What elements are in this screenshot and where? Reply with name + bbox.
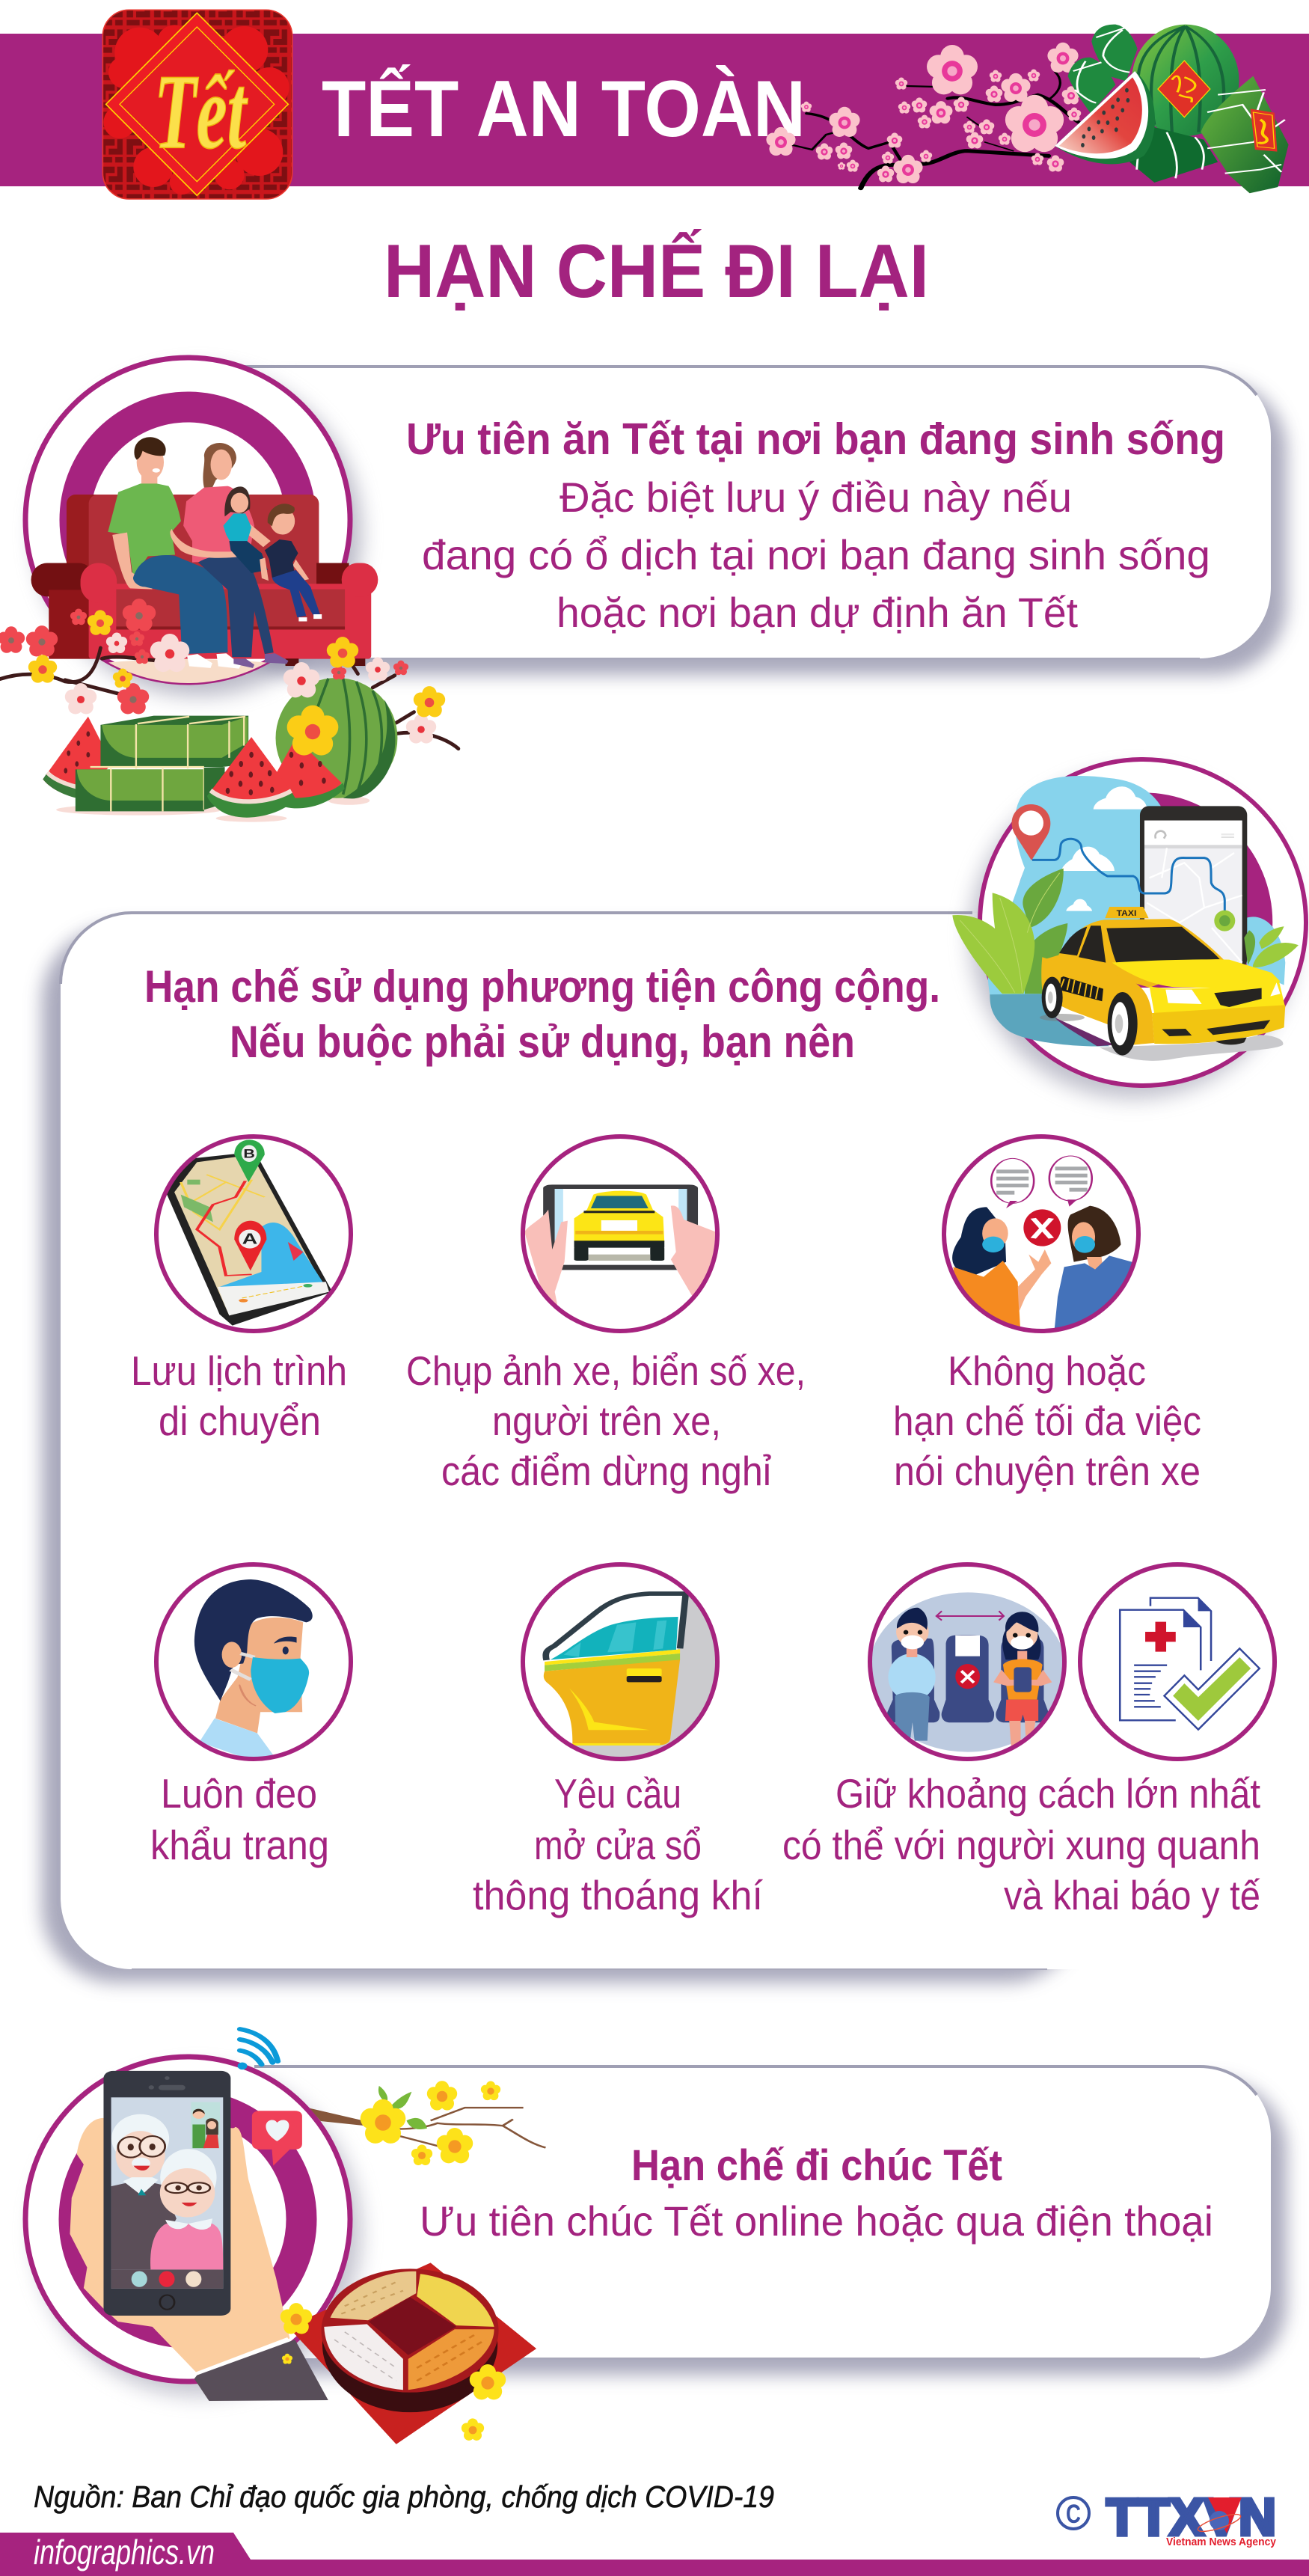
label: Yêu cầu: [554, 1770, 681, 1817]
man: [108, 437, 241, 669]
panel shadow: [42, 926, 1082, 1983]
label: Chụp ảnh xe, biển số xe,: [406, 1347, 806, 1394]
watermelon slices front: [266, 738, 342, 801]
hand: [70, 2118, 289, 2373]
icon: map on phone: [156, 1136, 351, 1331]
label: thông thoáng khí: [473, 1872, 764, 1918]
label: có thể với người xung quanh: [782, 1822, 1260, 1868]
panel text: Đặc biệt lưu ý điều này nếu: [560, 474, 1072, 521]
label: di chuyển: [159, 1398, 321, 1444]
icon: taxi and route in circle: TAXI: [1117, 909, 1136, 918]
icon: video call on phone in circle: [25, 2029, 361, 2401]
thumb overlap: [231, 2128, 245, 2185]
grandmother: [160, 2149, 217, 2206]
label: Không hoặc: [948, 1347, 1146, 1394]
label: nói chuyện trên xe: [894, 1448, 1201, 1494]
item: avoid talking: [893, 1136, 1201, 1494]
label: khẩu trang: [150, 1822, 329, 1868]
watermelon slice back: [43, 717, 112, 798]
item: open the window: [473, 1564, 764, 1918]
panel shadow: [224, 2080, 1287, 2375]
label: các điểm dừng nghỉ: [441, 1448, 771, 1494]
label: Luôn đeo: [161, 1770, 317, 1817]
label: hạn chế tối đa việc: [893, 1398, 1201, 1444]
panel heading: Hạn chế sử dụng phương tiện công cộng.: [144, 961, 940, 1012]
icon: taxi and route in circle: [952, 759, 1306, 1098]
decoration: apricot branch: [310, 2081, 545, 2165]
panel: limit Tet visits: [150, 2066, 1287, 2375]
icon: family on sofa in circle: [25, 358, 378, 696]
copyright mark: C: [1066, 2500, 1081, 2529]
panel text: Hạn chế đi chúc Tết: [631, 2141, 1002, 2190]
branch of pink blossoms in header: [766, 43, 1081, 189]
icon: man in mask: [156, 1564, 351, 1760]
icon: map on phone: A: [242, 1231, 257, 1247]
label: [893, 1347, 1201, 1494]
copyright mark: [1058, 2497, 1089, 2529]
label: [150, 1770, 329, 1868]
icon: passengers with empty seat between: [868, 1564, 1067, 1759]
logo: TTXVN: Vietnam News Agency: [1166, 2536, 1277, 2548]
panel heading: Nếu buộc phải sử dụng, bạn nên: [230, 1017, 855, 1067]
icon: Tet badge: Tết: [154, 52, 248, 171]
panel text: [420, 2141, 1213, 2245]
icon: car door with open window: [523, 1564, 722, 1764]
label: [131, 1347, 347, 1444]
header band: [0, 34, 1309, 186]
icon: tablet photographing taxi: [523, 1136, 717, 1331]
banh chung: [100, 716, 248, 767]
panel heading: [144, 961, 940, 1067]
illustration: watermelon and banh chung in header: [1055, 25, 1289, 193]
icon: map on phone: B: [243, 1146, 255, 1160]
item: save travel route: [131, 1136, 351, 1444]
panel: public transport: [42, 913, 1275, 1983]
panel: stay where you live: [150, 366, 1287, 675]
icon: two masked women talking: [944, 1136, 1138, 1331]
label: Giữ khoảng cách lớn nhất: [836, 1770, 1260, 1817]
panel text: [406, 414, 1225, 636]
woman: [183, 443, 289, 668]
label: Lưu lịch trình: [131, 1347, 347, 1394]
main title: HẠN CHẾ ĐI LẠI: [384, 230, 929, 313]
label: [406, 1347, 806, 1494]
icon: medical documents with check: [1080, 1564, 1275, 1759]
phone: [103, 2071, 230, 2316]
header title: TẾT AN TOÀN: [322, 64, 806, 153]
inset: [191, 2102, 220, 2149]
boy: [260, 504, 322, 621]
item: photograph the car: [406, 1136, 806, 1494]
panel text: hoặc nơi bạn dự định ăn Tết: [557, 589, 1078, 636]
whole watermelon: [276, 678, 397, 798]
footer band with site name: [0, 2533, 1309, 2576]
source line: Nguồn: Ban Chỉ đạo quốc gia phòng, chống dịch COVID-19: [34, 2479, 774, 2514]
site name: infographics.vn: [34, 2533, 215, 2572]
panel text: Ưu tiên ăn Tết tại nơi bạn đang sinh sống: [406, 414, 1225, 464]
grandfather: [111, 2180, 177, 2269]
label: [473, 1770, 764, 1918]
label: và khai báo y tế: [1004, 1872, 1260, 1918]
illustration: Tet food tray: [280, 2263, 536, 2444]
decoration: flowers, banh chung and watermelon: [0, 599, 459, 822]
girl: [224, 486, 268, 573]
label: mở cửa sổ: [534, 1822, 702, 1868]
panel text: Ưu tiên chúc Tết online hoặc qua điện thoại: [420, 2197, 1213, 2245]
label: [782, 1770, 1260, 1918]
icon: Tet badge: [102, 10, 292, 199]
label: người trên xe,: [492, 1398, 721, 1444]
panel text: đang có ổ dịch tại nơi bạn đang sinh sống: [422, 531, 1210, 578]
panel shadow: [224, 380, 1287, 675]
item: keep distance and medical declaration: [782, 1564, 1275, 1918]
logo: TTXVN: TTXVN: [1106, 2488, 1276, 2546]
wifi signal: [240, 2029, 278, 2064]
like bubble: [252, 2111, 302, 2166]
item: wear a mask: [150, 1564, 351, 1868]
